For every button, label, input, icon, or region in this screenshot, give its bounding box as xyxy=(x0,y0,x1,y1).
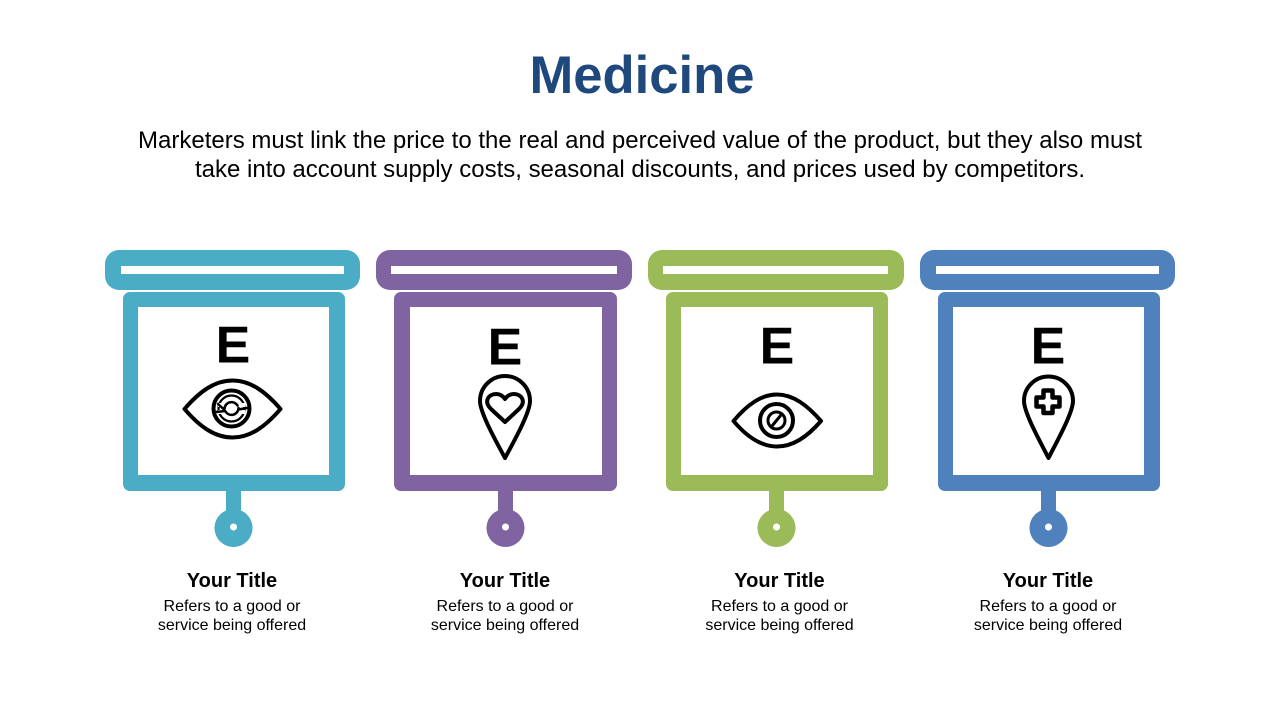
panel: blue projector screen xyxy=(920,250,1175,634)
screen frame xyxy=(666,292,888,491)
caption: Your Title xyxy=(734,570,825,592)
caption: Your Title xyxy=(187,570,277,592)
icon: eye with blocked pupil xyxy=(734,394,821,446)
caption: Refers to a good or xyxy=(164,598,301,615)
icon: location pin with medical cross xyxy=(1024,376,1073,458)
intro paragraph: take into account supply costs, seasonal discounts, and prices used by competitors. xyxy=(195,156,1085,183)
caption: Refers to a good or xyxy=(980,598,1117,615)
intro paragraph: Marketers must link the price to the real and perceived value of the product, but they also must xyxy=(138,127,1142,154)
pull cord handle xyxy=(1030,491,1068,547)
screen roller bar xyxy=(105,250,360,290)
caption: Refers to a good or xyxy=(437,598,574,615)
caption xyxy=(158,570,306,634)
caption: service being offered xyxy=(974,617,1122,634)
letter E: E xyxy=(488,318,522,376)
caption: Your Title xyxy=(1003,570,1093,592)
screen roller bar xyxy=(648,250,904,290)
panel: green projector screen xyxy=(648,250,904,634)
icon: location pin with heart xyxy=(480,376,530,458)
letter E: E xyxy=(1031,318,1065,376)
screen frame xyxy=(938,292,1160,491)
pull cord handle xyxy=(758,491,796,547)
pull cord handle xyxy=(214,491,252,547)
caption: Refers to a good or xyxy=(711,598,849,615)
title: Medicine xyxy=(529,46,755,105)
caption: service being offered xyxy=(158,617,306,634)
intro paragraph xyxy=(138,127,1142,183)
screen roller bar xyxy=(920,250,1175,290)
panel: purple projector screen xyxy=(376,250,632,634)
screen frame xyxy=(394,292,617,491)
caption xyxy=(431,570,579,634)
panel: teal projector screen xyxy=(105,250,360,634)
caption xyxy=(974,570,1122,634)
caption xyxy=(705,570,854,634)
letter E: E xyxy=(760,318,794,376)
caption: service being offered xyxy=(431,617,579,634)
icon: eye with refresh xyxy=(184,380,280,438)
letter E: E xyxy=(216,316,250,374)
screen frame xyxy=(123,292,345,491)
pull cord handle xyxy=(486,491,524,547)
caption: service being offered xyxy=(705,617,854,634)
screen roller bar xyxy=(376,250,632,290)
caption: Your Title xyxy=(460,570,550,592)
